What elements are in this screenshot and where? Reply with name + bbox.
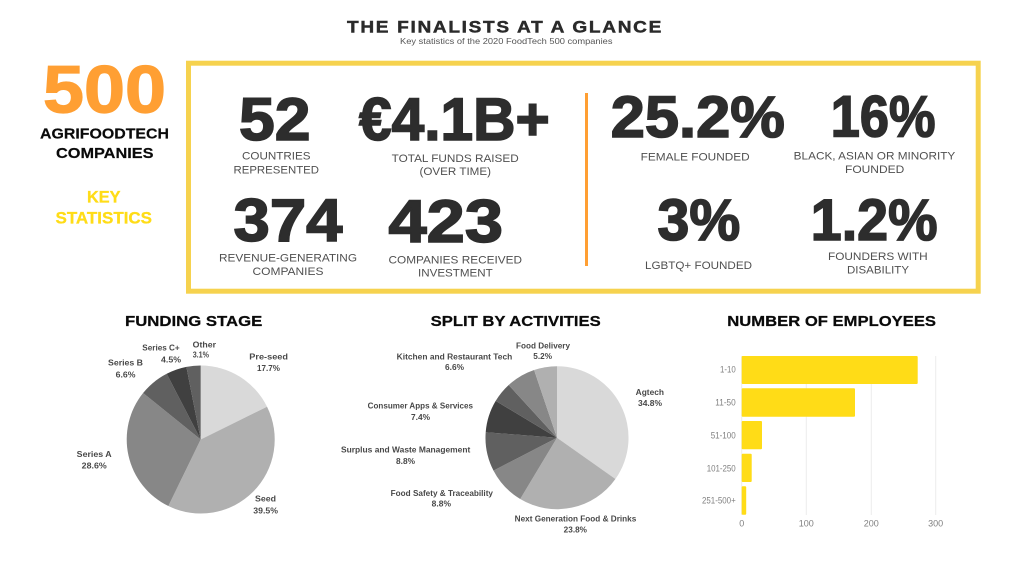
stat: female founded: 25.2%	[611, 85, 785, 150]
pie chart: activities	[485, 366, 629, 509]
pie labels: funding stage: 39.5%	[253, 506, 278, 515]
pie labels: activities: Consumer Apps & Services	[368, 401, 474, 410]
stat: companies received investment: 423	[388, 188, 503, 255]
pie labels: activities: 34.8%	[638, 399, 662, 408]
stat: lgbtq founded: LGBTQ+ FOUNDED	[645, 260, 752, 272]
heading: split by activities: SPLIT BY ACTIVITIES	[431, 313, 601, 330]
title: THE FINALISTS AT A GLANCE	[347, 17, 663, 36]
pie labels: funding stage: Seed	[255, 495, 276, 504]
subtitle: Key statistics of the 2020 FoodTech 500 companies	[400, 37, 612, 46]
pie labels: activities: Surplus and Waste Management	[341, 446, 471, 455]
bar chart category labels: 101-250	[707, 463, 736, 473]
stat: revenue-generating companies	[219, 187, 357, 278]
pie chart: funding stage	[127, 366, 275, 514]
stat: lgbtq founded: 3%	[658, 188, 740, 253]
stat: revenue-generating companies: REVENUE-GENERATING	[219, 253, 357, 265]
stat: companies received investment: INVESTMENT	[418, 268, 493, 280]
stat: founders with disability: 1.2%	[811, 188, 938, 253]
bar chart category labels: 251-500+	[702, 495, 736, 505]
pie labels: activities: Food Delivery	[516, 341, 571, 350]
pie labels: funding stage: Pre-seed	[249, 352, 288, 361]
heading: funding stage: FUNDING STAGE	[125, 313, 262, 330]
agrifoodtech companies label: COMPANIES	[56, 145, 154, 162]
stat: companies received investment: COMPANIES RECEIVED	[388, 254, 522, 266]
stat: companies received investment	[388, 188, 522, 280]
pie labels: activities: Food Safety & Traceability	[391, 489, 494, 498]
agrifoodtech companies label	[40, 125, 169, 162]
pie labels: activities: Agtech	[636, 388, 664, 397]
bar chart axis values: 0	[739, 519, 744, 529]
stat: total funds: (OVER TIME)	[420, 166, 491, 178]
stat: founders with disability: DISABILITY	[847, 264, 910, 276]
pie labels: funding stage: Series B	[108, 359, 143, 368]
stat: female founded: FEMALE FOUNDED	[641, 151, 750, 163]
bar chart axis values: 100	[799, 519, 814, 529]
stat: minority founded	[794, 84, 956, 176]
stat: total funds: TOTAL FUNDS RAISED	[392, 153, 519, 165]
stat: founders with disability: FOUNDERS WITH	[828, 251, 928, 263]
pie labels: funding stage: 17.7%	[257, 364, 280, 373]
pie labels: funding stage: 3.1%	[193, 350, 209, 359]
panel border	[188, 63, 978, 291]
pie labels: activities: Next Generation Food & Drinks	[515, 515, 637, 524]
bar chart category labels	[702, 365, 736, 505]
pie labels: activities: 23.8%	[564, 526, 587, 535]
pie labels: funding stage: 6.6%	[116, 371, 136, 380]
stat: minority founded: FOUNDED	[845, 164, 904, 176]
panel: split by activities	[341, 313, 664, 535]
pie labels: funding stage: Series C+	[142, 344, 180, 353]
pie labels: funding stage	[77, 341, 288, 515]
pie labels: activities	[341, 341, 664, 535]
pie labels: activities: 6.6%	[445, 363, 464, 372]
pie labels: funding stage: 4.5%	[161, 355, 181, 364]
bar chart axis values: 300	[928, 519, 943, 529]
stat: countries: 52	[239, 86, 310, 153]
big number 500: 500	[43, 52, 166, 128]
stat: countries: COUNTRIES	[242, 150, 310, 162]
stat: revenue-generating companies: 374	[234, 187, 343, 254]
panel: number of employees	[702, 313, 943, 529]
bar chart category labels: 11-50	[715, 397, 736, 407]
pie labels: activities: 5.2%	[533, 352, 552, 361]
stat: total funds: €4.1B+	[359, 86, 550, 153]
bar chart axis values	[739, 519, 943, 529]
pie labels: activities: 8.8%	[432, 500, 451, 509]
stat: revenue-generating companies: COMPANIES	[252, 266, 324, 278]
pie labels: activities: 8.8%	[396, 457, 415, 466]
pie labels: activities: Kitchen and Restaurant Tech	[397, 352, 513, 361]
pie labels: funding stage: Series A	[77, 450, 112, 459]
panel: key statistics box	[188, 63, 978, 291]
stat: countries	[234, 86, 319, 177]
stat: lgbtq founded	[645, 188, 752, 272]
bar chart category labels: 51-100	[711, 430, 736, 440]
bar chart category labels: 1-10	[720, 365, 736, 375]
bar chart axis values: 200	[864, 519, 879, 529]
key statistics label: KEY	[87, 189, 120, 207]
bar chart: employees	[742, 356, 918, 515]
heading: number of employees: NUMBER OF EMPLOYEES	[727, 313, 936, 330]
panel: funding stage	[77, 313, 288, 515]
pie labels: funding stage: 28.6%	[82, 461, 107, 470]
orange divider	[585, 93, 588, 266]
pie labels: activities: 7.4%	[411, 413, 430, 422]
title block	[347, 17, 663, 46]
stat: minority founded: BLACK, ASIAN OR MINORITY	[794, 151, 956, 163]
pie labels: funding stage: Other	[193, 341, 216, 350]
left sidebar headline	[40, 52, 169, 227]
stat: minority founded: 16%	[831, 84, 936, 150]
agrifoodtech companies label: AGRIFOODTECH	[40, 125, 169, 142]
key statistics label	[56, 189, 152, 227]
stat: countries: REPRESENTED	[234, 165, 319, 177]
key statistics label: STATISTICS	[56, 209, 152, 227]
